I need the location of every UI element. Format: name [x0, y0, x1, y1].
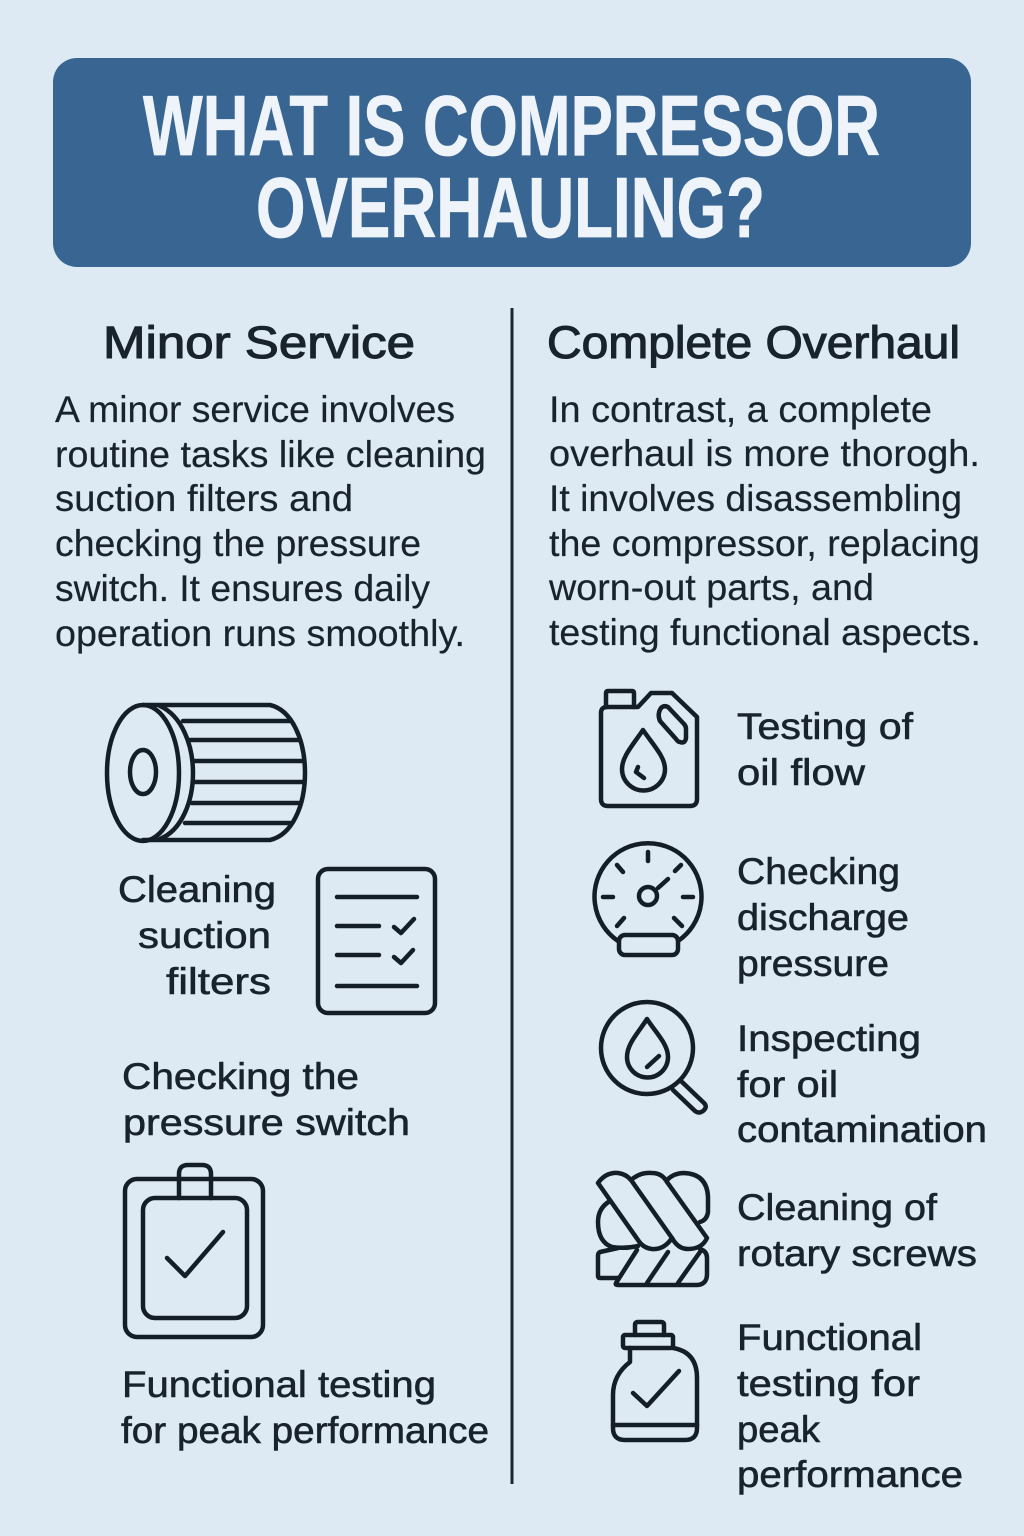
- center divider: [510, 308, 514, 1484]
- icon: suction filter: [107, 705, 305, 841]
- label: checking discharge pressure: pressure: [737, 943, 889, 984]
- label: functional testing for peak performance: peak: [737, 1409, 821, 1450]
- panel: minor service: [55, 317, 489, 1451]
- label: inspecting for oil contamination: Inspecting: [737, 1018, 921, 1059]
- label: functional testing for peak performance: testing for: [737, 1363, 920, 1404]
- label: checking discharge pressure: [737, 851, 909, 984]
- label: testing of oil flow: [737, 706, 914, 793]
- label: checking discharge pressure: discharge: [737, 897, 909, 938]
- text block: complete overhaul description: testing functional aspects.: [549, 612, 981, 653]
- label: cleaning suction filters: [118, 869, 276, 1002]
- label: testing of oil flow: Testing of: [737, 706, 914, 747]
- text block: minor service description: operation runs smoothly.: [55, 613, 465, 654]
- label: functional testing for peak performance: [121, 1364, 489, 1451]
- panel: complete overhaul: [547, 317, 987, 1495]
- text block: complete overhaul description: It involves disassembling: [549, 478, 962, 519]
- icon: clipboard check: [125, 1165, 263, 1337]
- label: cleaning of rotary screws: [737, 1187, 977, 1274]
- label: cleaning suction filters: filters: [166, 961, 271, 1002]
- label: cleaning suction filters: suction: [138, 915, 271, 956]
- label: cleaning suction filters: Cleaning: [118, 869, 276, 910]
- text block: minor service description: routine tasks like cleaning: [55, 434, 486, 475]
- text block: complete overhaul description: worn-out parts, and: [548, 567, 874, 608]
- title banner: [53, 58, 971, 267]
- label: checking the pressure switch: [122, 1056, 410, 1143]
- text block: minor service description: A minor service involves: [55, 389, 455, 430]
- text block: complete overhaul description: overhaul is more thorogh.: [549, 433, 980, 474]
- icon: bottle with check: [613, 1322, 697, 1440]
- label: functional testing for peak performance: Functional: [737, 1317, 922, 1358]
- label: testing of oil flow: oil flow: [737, 752, 865, 793]
- label: functional testing for peak performance: [737, 1317, 963, 1495]
- label: inspecting for oil contamination: for oil: [737, 1064, 838, 1105]
- heading: complete overhaul: Complete Overhaul: [547, 317, 960, 368]
- text block: minor service description: [55, 389, 486, 654]
- text block: complete overhaul description: In contrast, a complete: [549, 389, 932, 430]
- label: checking the pressure switch: Checking the: [122, 1056, 359, 1097]
- label: cleaning of rotary screws: Cleaning of: [737, 1187, 938, 1228]
- text block: minor service description: suction filters and: [55, 478, 353, 519]
- label: inspecting for oil contamination: [737, 1018, 987, 1150]
- icon: magnifier with oil drop: [601, 1002, 706, 1112]
- icon: oil can: [601, 691, 697, 806]
- label: cleaning of rotary screws: rotary screws: [737, 1233, 977, 1274]
- title banner: OVERHAULING?: [256, 161, 765, 256]
- icon: rotary screws: [598, 1173, 708, 1285]
- label: functional testing for peak performance: performance: [737, 1454, 963, 1495]
- text block: complete overhaul description: the compressor, replacing: [549, 523, 980, 564]
- label: checking discharge pressure: Checking: [737, 851, 900, 892]
- label: functional testing for peak performance: for peak performance: [121, 1410, 489, 1451]
- label: checking the pressure switch: pressure switch: [123, 1102, 410, 1143]
- label: functional testing for peak performance: Functional testing: [122, 1364, 436, 1405]
- text block: minor service description: switch. It ensures daily: [55, 568, 430, 609]
- text block: minor service description: checking the pressure: [55, 523, 421, 564]
- text block: complete overhaul description: [548, 389, 981, 653]
- heading: minor service: Minor Service: [103, 317, 415, 368]
- icon: pressure gauge: [594, 843, 701, 955]
- label: inspecting for oil contamination: contamination: [737, 1109, 987, 1150]
- icon: checklist: [318, 869, 435, 1013]
